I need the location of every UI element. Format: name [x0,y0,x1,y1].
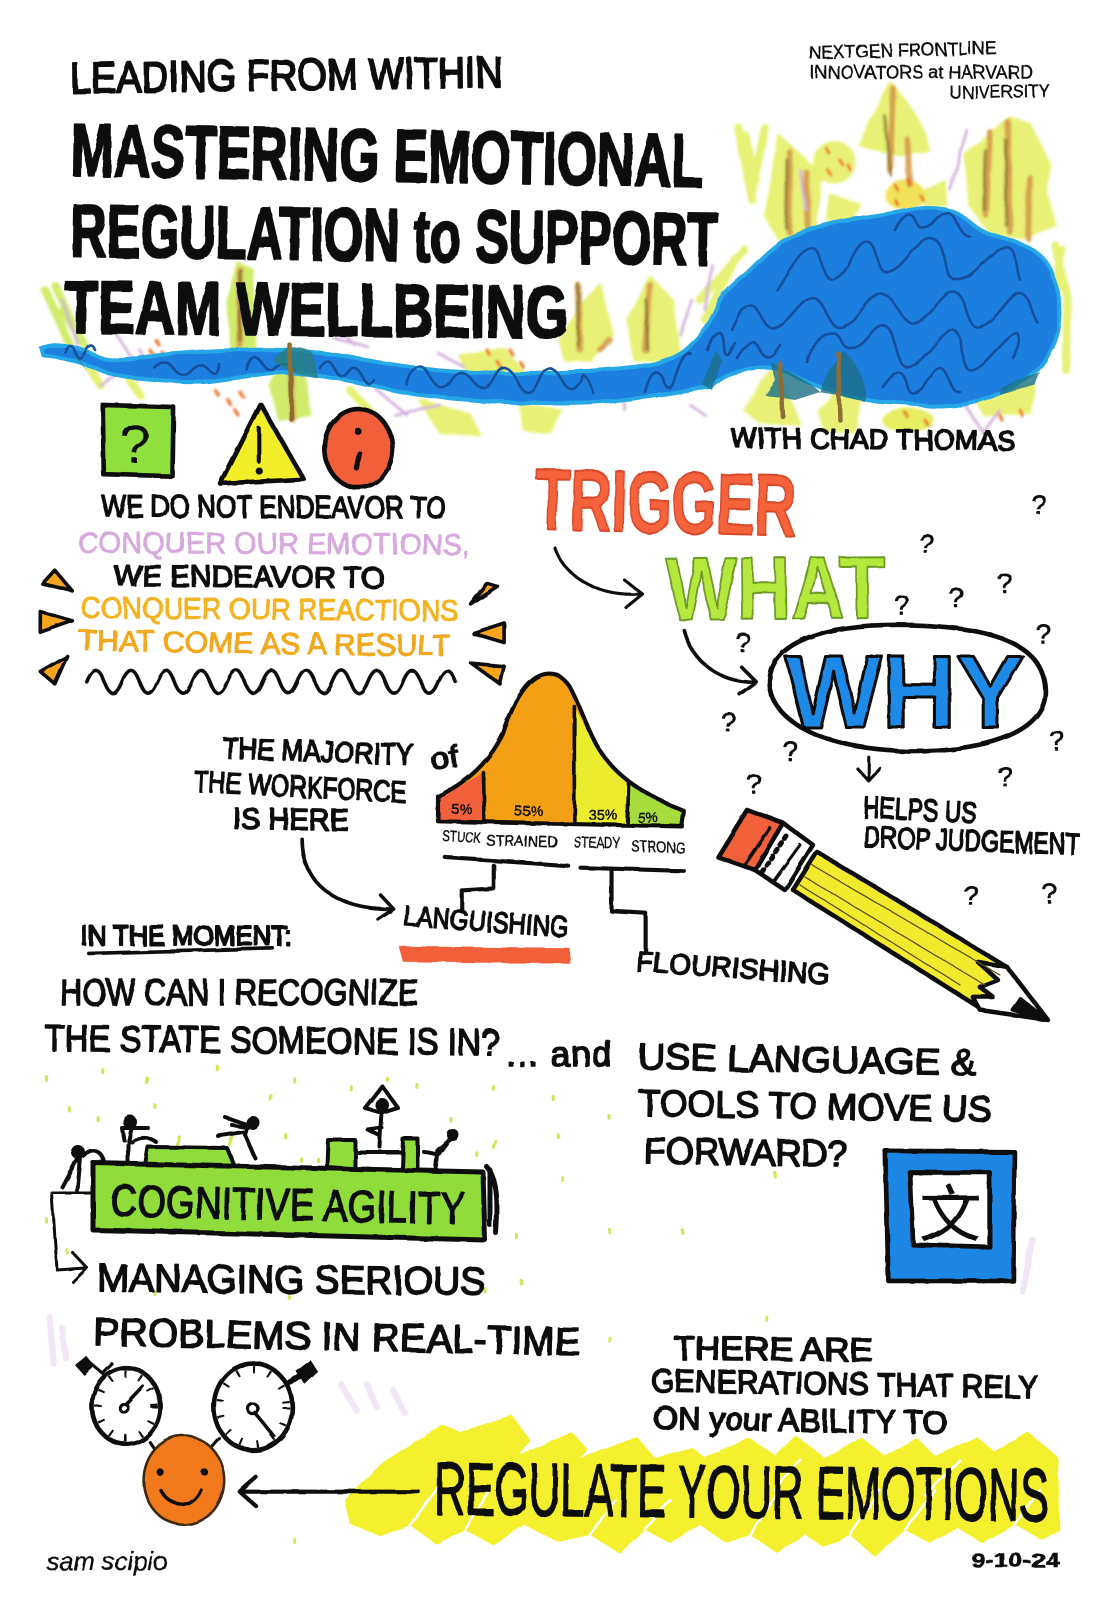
background: forest of trees [45,83,1068,435]
icon: smiley [144,1436,224,1525]
yellow highlight scribble [345,1415,1060,1557]
text: the majority of the workforce is here: THE WORKFORCE [193,765,407,809]
question: recognise state: THE STATE SOMEONE IS IN? [44,1017,499,1063]
text block: conquer reactions not emotions: WE DO NOT ENDEAVOR TO [101,489,446,525]
icon: translate sign [885,1151,1014,1281]
question marks: ? [1042,878,1057,909]
small text: organiser: INNOVATORS at HARVARD [810,62,1033,83]
text: generations: ON your ABILITY TO [653,1400,948,1441]
text: generations [651,1330,1039,1441]
text block: conquer reactions not emotions: CONQUER OUR EMOTIONS, [77,527,470,562]
text: the majority of the workforce is here: of [428,740,461,777]
chart: bell curve: 55% [514,804,544,820]
chart: bell curve: 5% [637,810,658,826]
signature: sam scipio [46,1548,167,1576]
text block: conquer reactions not emotions: WE ENDEAVOR TO [114,560,384,595]
subtitle: LEADING FROM WITHIN [70,49,503,103]
text: generations: THERE ARE [673,1330,873,1369]
chart: bell curve [438,674,685,857]
label: flourishing: FLOURISHING [635,946,831,992]
title: TEAM WELLBEING [64,266,569,354]
question: use language and tools: FORWARD? [643,1129,848,1175]
river and lake [41,208,1060,420]
text: helps us drop judgement: HELPS US [862,791,977,830]
heading: in the moment: IN THE MOMENT: [81,920,291,951]
banner label: COGNITIVE AGILITY [110,1175,466,1234]
label: languishing: LANGUISHING [402,901,569,944]
chart: bell curve: STRAINED [485,832,558,852]
text: generations: GENERATIONS THAT RELY [651,1362,1039,1405]
icon: semicolon circle [324,409,393,488]
text block: conquer reactions not emotions: THAT COME AS A RESULT [78,625,451,663]
icon: question mark square [102,405,174,476]
question: recognise state [44,971,499,1063]
small text: organiser [808,37,1050,103]
text block: conquer reactions not emotions [77,489,470,663]
question marks: ? [735,627,750,658]
question marks: ? [963,880,979,911]
question marks: ? [1036,619,1051,650]
icon: pencil [718,810,1048,1020]
title: MASTERING EMOTIONAL [70,109,704,203]
question marks: ? [1049,725,1065,756]
arrow: agility to managing [52,1193,90,1282]
platform top blocks [145,1139,418,1171]
question marks: ? [721,706,736,737]
arrow: trigger to what [555,548,643,607]
text block: conquer reactions not emotions: CONQUER OUR REACTIONS [81,592,459,628]
question: use language and tools [506,1035,992,1175]
decorative green flecks [46,1066,775,1542]
label: languishing [399,901,570,964]
tiny climbing figures [62,1086,497,1233]
title [64,109,719,354]
text: helps us drop judgement [862,791,1080,862]
faint lilac marks [50,1240,1033,1413]
why bubble: WHY [785,633,1025,749]
arrow: regulate to smiley [240,1477,418,1506]
question: use language and tools: USE LANGUAGE & [637,1035,977,1083]
question marks [721,489,1065,911]
connector: flourishing bracket [581,868,684,950]
text: managing serious problems: PROBLEMS IN REAL-TIME [93,1310,581,1364]
arrow: why down [857,757,880,781]
date: 9-10-24 [971,1549,1060,1572]
text: the majority of the workforce is here [193,732,461,838]
question: recognise state: HOW CAN I RECOGNIZE [60,971,418,1013]
question marks: ? [949,582,964,613]
question marks: ? [782,735,798,766]
text: managing serious problems: MANAGING SERIOUS [97,1256,486,1304]
cognitive agility platform [62,1086,497,1240]
icon: translate sign: 文 [919,1165,981,1255]
heading: trigger: TRIGGER [534,451,797,555]
chart: bell curve: 35% [589,808,618,824]
arrow: majority to languishing [302,839,394,919]
arrow: what to why [684,630,756,694]
question marks: ? [894,590,910,621]
question marks: ? [997,761,1013,792]
chart: bell curve: STUCK [442,828,481,847]
question marks: ? [997,568,1013,599]
text: the majority of the workforce is here: THE MAJORITY [222,732,414,772]
text: with Chad Thomas: WITH CHAD THOMAS [730,422,1016,456]
question: use language and tools: TOOLS TO MOVE US [638,1082,992,1130]
question marks: ? [746,768,762,799]
icon: left stopwatch [75,1356,160,1444]
wavy underline [87,670,456,693]
chart: bell curve: STEADY [574,835,620,852]
text: managing serious problems [93,1256,581,1364]
question marks: ? [1031,489,1047,520]
icon: right stopwatch [214,1359,318,1450]
question: use language and tools: ... and [506,1035,612,1074]
icon: orange emphasis triangles [40,570,504,684]
green banner [93,1163,485,1240]
connector: languishing bracket [445,857,568,911]
icon: warning triangle [220,404,304,483]
small text: organiser: NEXTGEN FRONTLINE [808,37,997,63]
text: the majority of the workforce is here: IS HERE [232,802,350,838]
chart: bell curve: STRONG [631,838,685,857]
chart: bell curve: 5% [451,802,472,818]
small text: organiser: UNIVERSITY [950,80,1050,103]
heading: what: WHAT [666,538,885,639]
icon: question mark square: ? [120,415,150,475]
title: REGULATION to SUPPORT [70,189,719,281]
question marks: ? [919,529,934,560]
